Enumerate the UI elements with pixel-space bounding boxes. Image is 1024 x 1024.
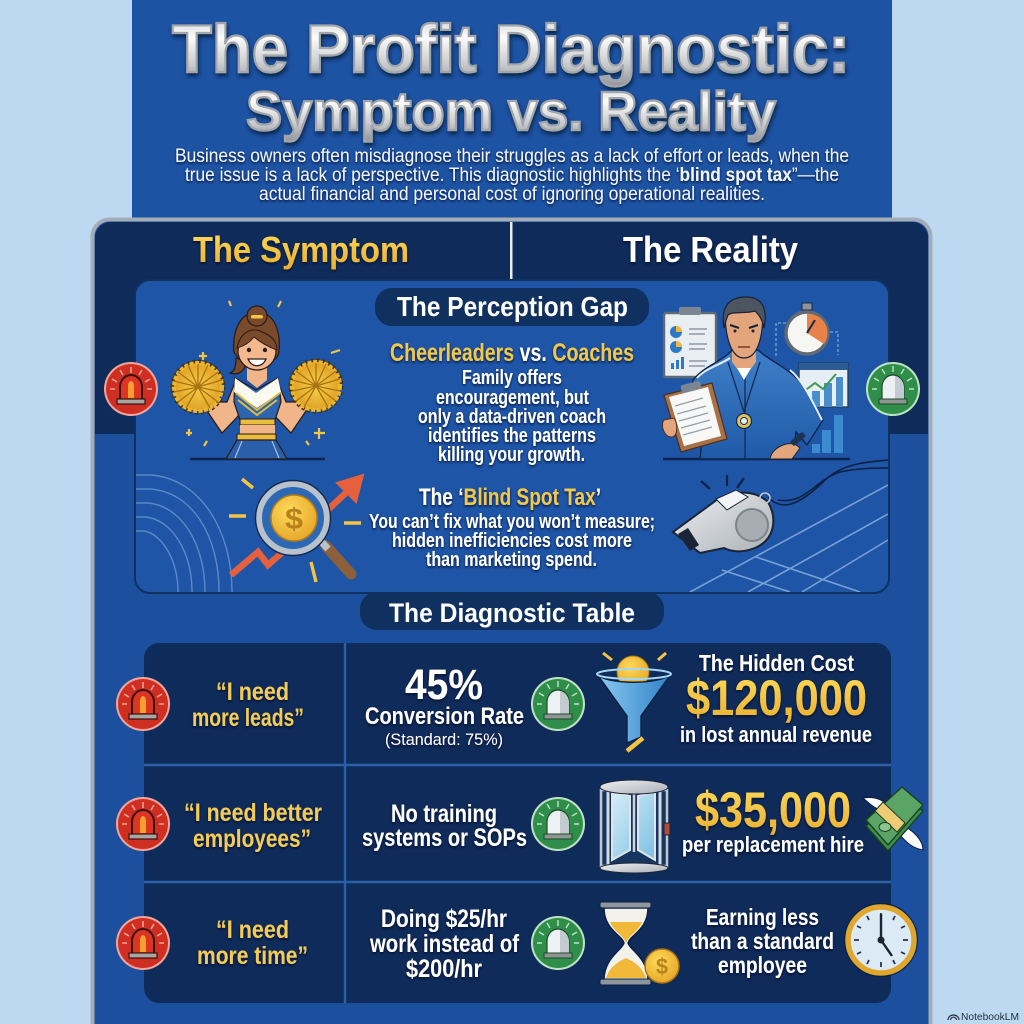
reality text: $200/hr [406, 955, 482, 983]
reality text [369, 905, 520, 983]
icon: funnel with coin [597, 653, 671, 751]
icon: red siren [116, 797, 170, 851]
symptom quote: “I need [216, 678, 289, 706]
text block: cheerleaders vs coaches: Cheerleaders vs. Coaches [390, 339, 634, 367]
illustration: cheerleader [174, 301, 340, 459]
back clipboard [664, 313, 716, 377]
text block: blind spot tax: You can’t fix what you won’t measure; [369, 510, 655, 533]
lanyard and medal [728, 362, 760, 412]
icon: hourglass with coin [600, 902, 679, 985]
icon: red siren [116, 916, 170, 970]
intro paragraph [175, 146, 849, 205]
jacket [690, 350, 823, 459]
neck and shirt [732, 348, 756, 378]
icon: red siren [116, 677, 170, 731]
row 2 [116, 780, 923, 873]
intro paragraph: true issue is a lack of perspective. This diagnostic highlights the ‘blind spot tax”—the [185, 165, 839, 186]
hidden cost: in lost annual revenue [680, 722, 872, 747]
cost text: employee [718, 952, 807, 978]
cost text: Earning less [706, 904, 819, 930]
cost text [691, 904, 834, 978]
column divider [510, 222, 512, 288]
reality text [362, 800, 527, 852]
title [172, 11, 850, 142]
icon: green siren [531, 797, 585, 851]
replacement cost: per replacement hire [682, 832, 864, 857]
watermark: NotebookLM: NotebookLM [961, 1011, 1019, 1023]
symptom quote [197, 916, 308, 970]
reality stat: 45% [405, 661, 483, 709]
intro paragraph: actual financial and personal cost of ignoring operational realities. [259, 184, 765, 205]
icon: revolving door [600, 780, 670, 873]
illustration: magnifying glass over chart: $ [285, 503, 303, 536]
text block: blind spot tax: than marketing spend. [426, 548, 597, 571]
replacement cost: $35,000 [695, 782, 851, 838]
dashed flow [776, 323, 838, 356]
icon: green siren [531, 677, 585, 731]
row 3 [116, 902, 918, 985]
header panel [132, 0, 892, 218]
hidden cost: $120,000 [686, 670, 867, 726]
text block: cheerleaders vs coaches: killing your growth. [438, 443, 585, 466]
text block: cheerleaders vs coaches: identifies the patterns [428, 424, 596, 447]
hidden cost: The Hidden Cost [699, 650, 854, 676]
hand on hip [770, 444, 800, 459]
icon: green siren right [866, 362, 920, 416]
pill heading: The Perception Gap: The Perception Gap [397, 291, 628, 322]
track lines right [690, 485, 888, 592]
symptom quote [184, 799, 322, 853]
torso [234, 378, 281, 420]
symptom quote: “I need better [184, 799, 322, 827]
reality text: No training [391, 800, 497, 828]
title: The Profit Diagnostic: [172, 11, 850, 87]
text block: cheerleaders vs coaches [390, 339, 634, 466]
symptom quote: more time” [197, 942, 308, 970]
diagnostic table [144, 643, 891, 1003]
reality stat [365, 661, 524, 749]
symptom quote [192, 678, 304, 732]
reality stat: Conversion Rate [365, 703, 524, 730]
icon: flying money [863, 787, 923, 851]
illustration: whistle [673, 460, 889, 553]
text block: cheerleaders vs coaches: encouragement, but [436, 386, 589, 409]
icon: red siren left [104, 362, 158, 416]
symptom quote: employees” [193, 825, 311, 853]
reality text: Doing $25/hr [381, 905, 507, 933]
title: Symptom vs. Reality [246, 80, 776, 142]
text block: blind spot tax: The ‘Blind Spot Tax’ [419, 484, 601, 511]
reality stat: (Standard: 75%) [385, 730, 503, 749]
symptom quote: more leads” [192, 704, 304, 732]
face [247, 368, 267, 388]
intro paragraph: Business owners often misdiagnose their struggles as a lack of effort or leads, when the [175, 146, 849, 167]
hidden cost [680, 650, 872, 747]
reality text: work instead of [369, 930, 520, 958]
icon: clock [844, 904, 918, 976]
arms [205, 380, 241, 433]
replacement cost [682, 782, 864, 857]
bar chart [812, 415, 843, 453]
stopwatch [802, 303, 812, 310]
illustration: magnifying glass over chart [229, 475, 363, 582]
text block: cheerleaders vs coaches: only a data-driven coach [418, 405, 606, 428]
reality text: systems or SOPs [362, 824, 527, 852]
row 1 [116, 650, 872, 751]
front clipboard [664, 383, 727, 452]
heading: The Reality: The Reality [623, 229, 798, 270]
hair back [230, 312, 279, 374]
heading: The Symptom: The Symptom [193, 229, 409, 270]
chart window [799, 363, 848, 407]
track lines left [136, 475, 232, 592]
main panel [92, 220, 930, 1024]
text block: blind spot tax [369, 484, 655, 571]
panel: perception gap [135, 280, 889, 593]
text block: blind spot tax: hidden inefficiencies cost more [392, 529, 632, 552]
icon: hourglass with coin: $ [656, 954, 668, 979]
symptom quote: “I need [216, 916, 289, 944]
cost text: than a standard [691, 928, 834, 954]
pom-poms [174, 362, 340, 412]
icon: green siren [531, 916, 585, 970]
pill heading: The Diagnostic Table: The Diagnostic Table [389, 598, 635, 628]
text block: cheerleaders vs coaches: Family offers [462, 366, 562, 389]
head [725, 310, 763, 358]
illustration: coach [662, 297, 850, 459]
